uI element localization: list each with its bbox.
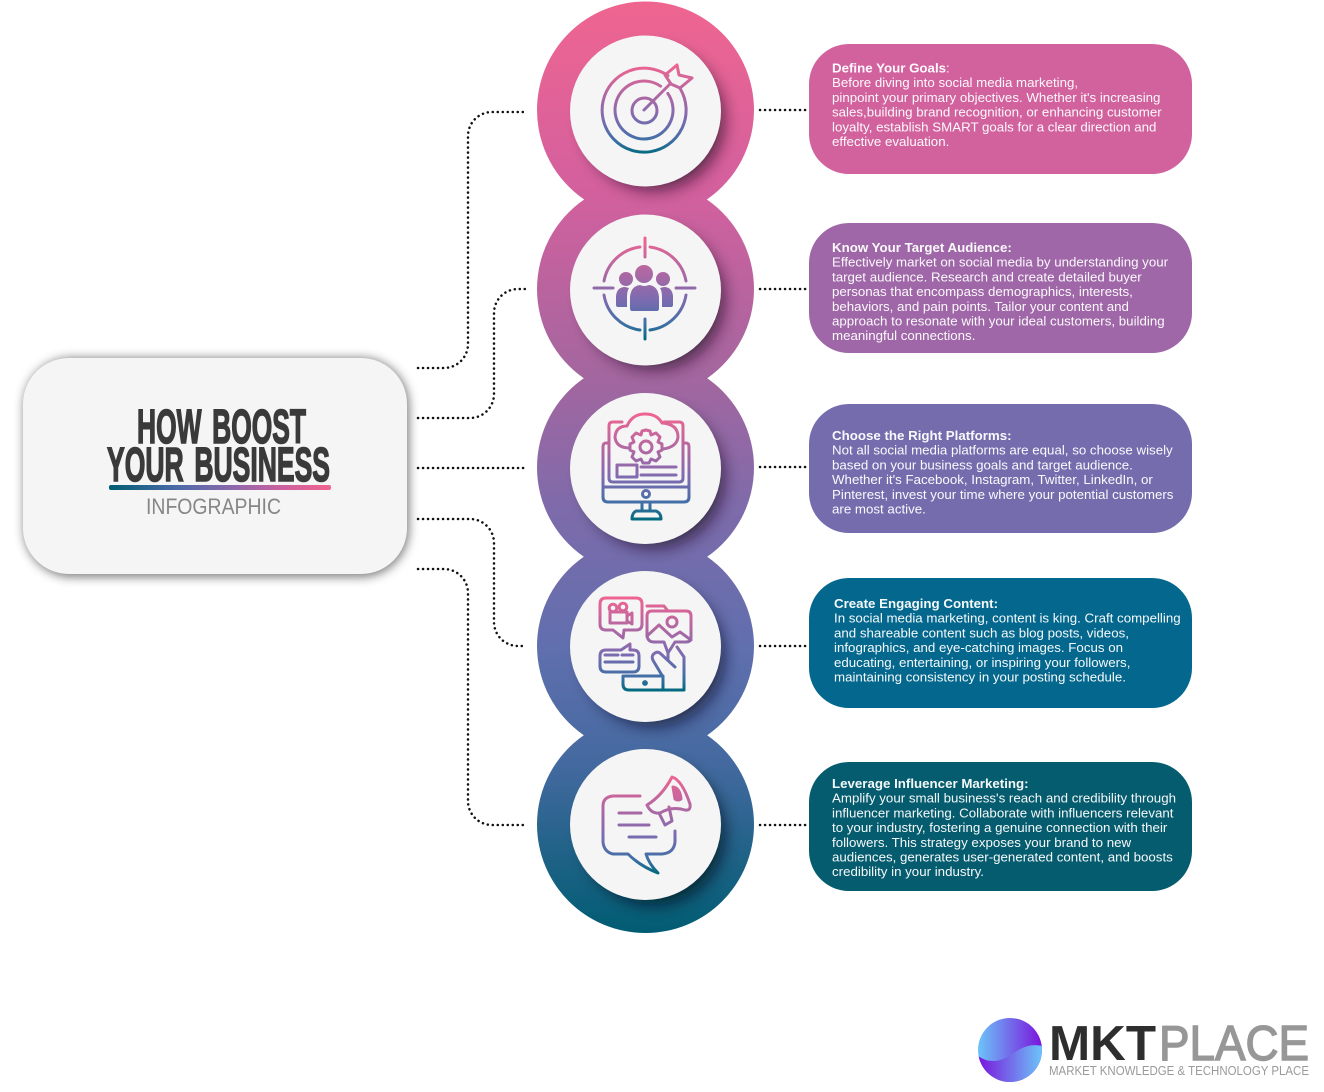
panel 1 text: loyalty, establish SMART goals for a clear direction and (832, 119, 1156, 134)
panel 4 text: In social media marketing, content is king. Craft compelling (834, 611, 1181, 626)
panel 1 text: effective evaluation. (832, 134, 949, 149)
panel 1 text: Define Your Goals: (832, 60, 950, 76)
logo wordmark dark: MKT (1049, 1017, 1156, 1071)
panel 4 text: and shareable content such as blog posts, videos, (834, 625, 1129, 640)
panel 2 text: Effectively market on social media by understanding your (832, 255, 1169, 270)
dotted connectors: title card to circles (418, 112, 527, 825)
subtitle: INFOGRAPHIC (146, 494, 281, 519)
card surface (23, 358, 407, 574)
panel 2 text: target audience. Research and create detailed buyer (832, 269, 1142, 284)
column background: five overlapping circles (530, 0, 762, 940)
inner disc 5 (570, 749, 721, 900)
inner disc 3 (570, 393, 721, 544)
left card: title block (23, 358, 409, 577)
inner disc 1 (570, 36, 721, 186)
crosshair ring (594, 238, 695, 339)
panel 4 text: Create Engaging Content: (834, 596, 998, 611)
panel 5 text: to your industry, fostering a genuine connection with their (832, 820, 1168, 835)
panel: define your goals (809, 44, 1192, 174)
logo wordmark grey: PLACE (1159, 1017, 1309, 1071)
panel 1 text: sales,building brand recognition, or enhancing customer (832, 105, 1162, 120)
panel 2 text: personas that encompass demographics, interests, (832, 284, 1133, 299)
card shadow (24, 358, 409, 577)
icon: cloud gear monitor (603, 414, 689, 519)
panel 1 text: Before diving into social media marketing, (832, 75, 1078, 90)
title underline (109, 485, 331, 490)
panel: leverage influencer marketing (809, 762, 1192, 891)
panel 4 text: infographics, and eye-catching images. Focus on (834, 640, 1123, 655)
panel 4 text: maintaining consistency in your posting schedule. (834, 670, 1126, 684)
panel 3 text: Choose the Right Platforms: (832, 428, 1012, 443)
icon: content bubbles and hand (600, 598, 691, 690)
panel 5 text: followers. This strategy exposes your brand to new (832, 835, 1131, 850)
panel: create engaging content (809, 578, 1192, 708)
panel: know your target audience (809, 223, 1192, 353)
panel 3 text: based on your business goals and target audience. (832, 457, 1133, 472)
panel 5 text: audiences, generates user-generated content, and boosts (832, 850, 1173, 864)
panel 2 text: Know Your Target Audience: (832, 240, 1012, 255)
icon: target audience (594, 238, 695, 339)
panel 1 text: pinpoint your primary objectives. Whether it's increasing (832, 90, 1160, 105)
central connector column (530, 0, 762, 940)
panel 4 text: educating, entertaining, or inspiring your followers, (834, 655, 1130, 670)
logo mark (978, 1018, 1042, 1082)
panel 2 text: meaningful connections. (832, 328, 975, 343)
title line 1: HOW BOOST (137, 401, 306, 454)
icon: target with arrow (602, 65, 692, 152)
panel 5 text: Amplify your small business's reach and credibility through (832, 791, 1176, 806)
people group (616, 265, 673, 311)
title line 2: YOUR BUSINESS (107, 439, 330, 492)
panel 2 text: behaviors, and pain points. Tailor your content and (832, 299, 1129, 314)
panel 3 text: Not all social media platforms are equal, so choose wisely (832, 443, 1173, 458)
inner disc 2 (570, 214, 721, 366)
panel 3 text: Whether it's Facebook, Instagram, Twitter, LinkedIn, or (832, 472, 1153, 487)
panel 5 text: influencer marketing. Collaborate with influencers relevant (832, 805, 1174, 820)
logo: MKTPLACE (978, 1017, 1309, 1082)
panel: choose the right platforms (809, 404, 1192, 533)
inner disc 4 (570, 571, 721, 722)
panel 2 text: approach to resonate with your ideal customers, building (832, 314, 1165, 328)
panel 5 text: Leverage Influencer Marketing: (832, 776, 1029, 791)
dotted connectors: circles to panels (760, 110, 806, 825)
panel 5 text: credibility in your industry. (832, 864, 984, 879)
panel 3 text: are most active. (832, 502, 926, 516)
panel 3 text: Pinterest, invest your time where your potential customers (832, 487, 1174, 502)
icon: speech bubble with megaphone (603, 777, 690, 873)
